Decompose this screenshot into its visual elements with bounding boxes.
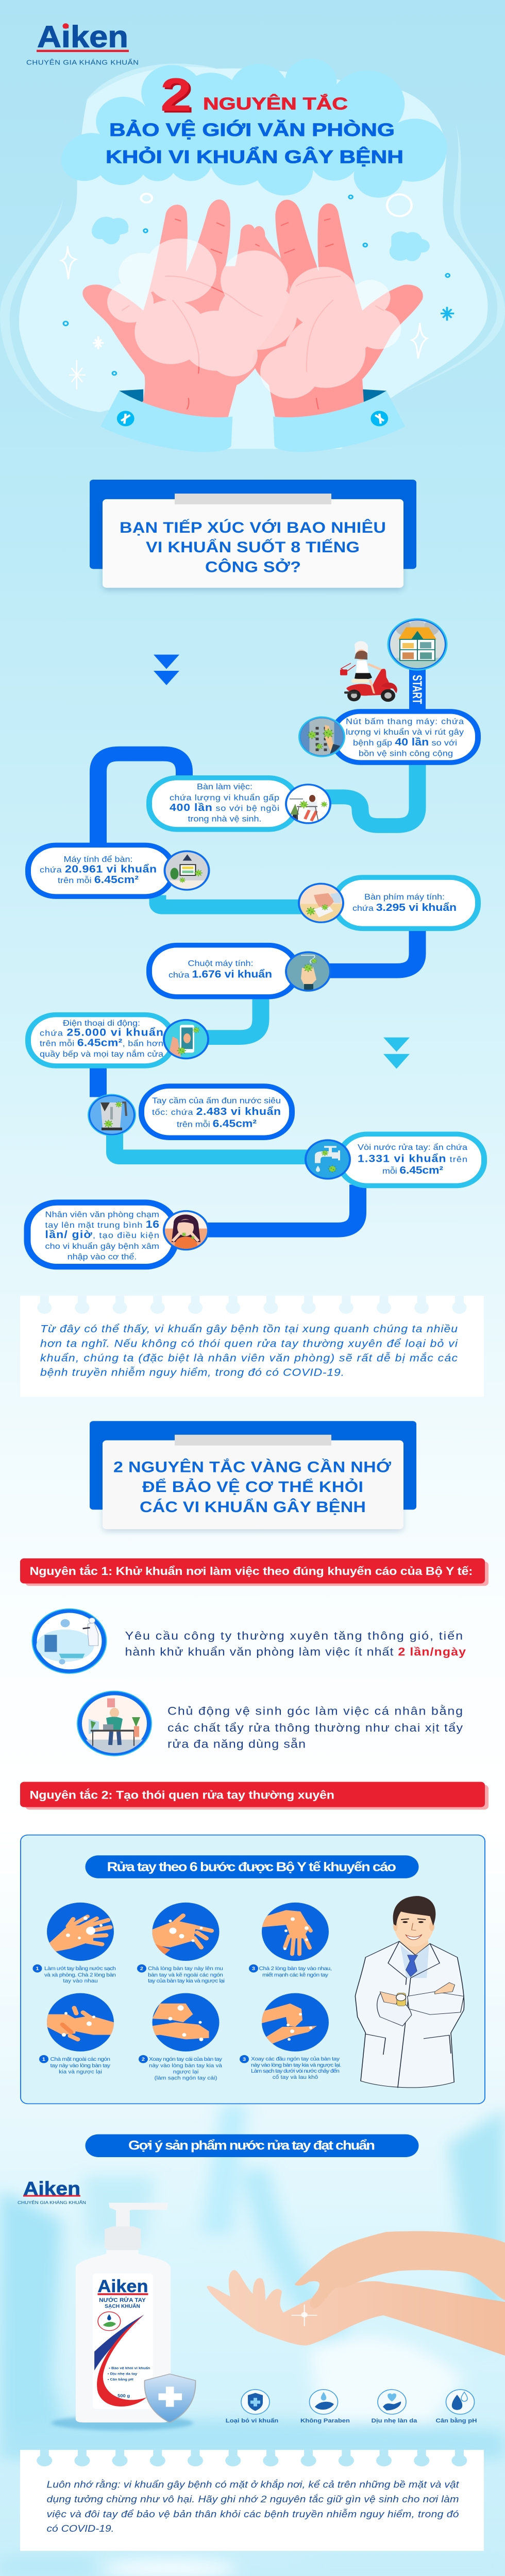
rule 1 point 1: Yêu cầu công ty thường xuyên tăng thông gió, tiến xyxy=(125,1630,463,1642)
step 1 caption: tay vào nhau xyxy=(63,1978,98,1984)
bubble: keyboard: Bàn phím máy tính: xyxy=(364,892,445,902)
bubble: elevator: lượng vi khuẩn và vi rút gây xyxy=(346,727,464,737)
left cuff xyxy=(100,391,232,452)
bubble: faucet: 1.331 vi khuẩn trên xyxy=(358,1153,467,1164)
product pill: Gợi ý sản phẩm nước rửa tay đạt chuẩn xyxy=(128,2138,375,2153)
icon: start house xyxy=(388,619,447,671)
step 3 caption: Chà 2 lòng bàn tay vào nhau, xyxy=(259,1966,332,1972)
bubble: faucet: mỗi 6.45cm² xyxy=(382,1164,443,1176)
step 1 caption: 1 xyxy=(36,1967,39,1972)
bubble: kettle xyxy=(141,1086,292,1138)
step 6 caption: 3 xyxy=(243,2057,246,2062)
scooter rider xyxy=(340,641,397,702)
title: 2 xyxy=(160,69,192,121)
rule 1 banner: Nguyên tắc 1: Khử khuẩn nơi làm việc theo đúng khuyến cáo của Bộ Y tế: xyxy=(30,1565,473,1578)
icon: pH balance xyxy=(435,2389,477,2424)
bubble: elevator: bồn vệ sinh công cộng xyxy=(359,749,453,758)
connector: start pole xyxy=(409,664,426,714)
bubble: elevator: bệnh gấp 40 lần so với xyxy=(353,736,457,748)
right hand xyxy=(252,200,423,419)
right cuff xyxy=(273,391,405,452)
connector: elevator to desk xyxy=(319,760,417,826)
note: conclusion 2: dụng tưởng chừng như vô hại. Hãy ghi nhớ 2 nguyên tắc giữ gìn vệ sinh cho nơi làm xyxy=(46,2494,459,2505)
step 6 caption: này vào lòng bàn tay kia và ngược lại. xyxy=(251,2062,341,2068)
panel: six hand washing steps xyxy=(21,1835,485,2104)
note: conclusion 1: hơn ta nghĩ. Nếu không có thói quen rửa tay thường xuyên để loại bỏ vi xyxy=(40,1337,458,1349)
connector: mouse to phone xyxy=(191,996,261,1038)
step 2 caption: tay của bàn tay kia và ngược lại xyxy=(148,1978,225,1984)
step 6 image xyxy=(262,1993,329,2052)
bubble: desk: 400 lần so với bệ ngồi xyxy=(170,801,279,813)
product bottle: NƯỚC RỬA TAY xyxy=(99,2296,146,2303)
bubble: faucet xyxy=(339,1134,484,1185)
product bottle: • Bảo vệ khỏi vi khuẩn xyxy=(109,2366,150,2370)
title: KHỎI VI KHUẨN GÂY BỆNH xyxy=(106,147,403,167)
step 5 caption: Xoay ngón tay cái của bàn tay xyxy=(149,2057,222,2062)
bubble: elevator: Nút bấm thang máy: chứa xyxy=(346,717,464,726)
heading card 1: CÔNG SỞ? xyxy=(205,558,301,575)
product logo: Aiken xyxy=(23,2177,80,2199)
step 2 caption: bàn tay và kẽ ngoài các ngón xyxy=(148,1972,223,1978)
step 3 image xyxy=(262,1903,329,1961)
product bottle xyxy=(52,2203,195,2431)
step 5 caption: 2 xyxy=(142,2057,145,2062)
connector: phone to kettle xyxy=(90,1065,107,1097)
title xyxy=(106,69,403,167)
icon: woman touching face xyxy=(164,1211,208,1250)
icon: kettle xyxy=(88,1094,136,1136)
bubble: face touching: lần/ giờ, tạo điều kiện xyxy=(45,1228,159,1241)
step 4 caption: tay này vào lòng bàn tay xyxy=(50,2063,110,2069)
icon: faucet xyxy=(306,1140,350,1179)
logo: CHUYÊN GIA KHÁNG KHUẨN xyxy=(26,58,139,66)
heading card 1: VI KHUẨN SUỐT 8 TIẾNG xyxy=(146,538,360,556)
step 3 caption: miết mạnh các kẽ ngón tay xyxy=(262,1972,328,1978)
dark inner cuffs xyxy=(119,389,386,404)
icon: keyboard xyxy=(299,884,343,922)
label: Cân bằng pH xyxy=(435,2417,477,2424)
bubble: desktop computer: chứa 20.961 vi khuẩn xyxy=(40,863,157,875)
heading card 2: ĐỂ BẢO VỆ CƠ THỂ KHỎI xyxy=(142,1478,363,1495)
heading card 2: CÁC VI KHUẨN GÂY BỆNH xyxy=(140,1498,366,1516)
doctor illustration xyxy=(355,1896,464,2088)
note: conclusion 2: việc và đôi tay để bảo vệ bản thân khỏi các bệnh truyền nhiễm nguy hiểm, trong đó xyxy=(46,2509,459,2520)
logo xyxy=(26,20,139,66)
START label: START xyxy=(410,675,424,704)
bubble: mouse xyxy=(149,945,297,997)
bubble: phone: quầy bếp và mọi tay nắm cửa xyxy=(40,1049,164,1059)
step 3 caption xyxy=(249,1964,332,1978)
bubble: desktop computer: trên mỗi 6.45cm² xyxy=(58,873,139,886)
arrow down blue xyxy=(154,655,179,685)
bubble: face touching: nhập vào cơ thể. xyxy=(68,1252,137,1261)
step 2 caption: 2 xyxy=(140,1967,143,1972)
bubble: keyboard: chứa 3.295 vi khuẩn xyxy=(352,901,457,913)
product logo: CHUYÊN GIA KHÁNG KHUẨN xyxy=(18,2200,86,2205)
step 4 caption: 1 xyxy=(42,2057,45,2062)
step 5 caption: này vào lòng bàn tay kia và xyxy=(149,2063,223,2069)
note: conclusion 1 xyxy=(20,1296,484,1397)
step 1 caption: và xà phòng. Chà 2 lòng bàn xyxy=(44,1972,116,1978)
icon: office desk xyxy=(286,785,330,823)
bubble: face touching xyxy=(27,1202,175,1267)
hero backdrop blob xyxy=(19,65,488,449)
step 6 caption: Làm sạch tay dưới vòi nước chảy đến xyxy=(251,2068,340,2074)
label: Loại bỏ vi khuẩn xyxy=(226,2417,278,2424)
bubble: elevator xyxy=(333,711,478,762)
bubble: mouse: Chuột máy tính: xyxy=(188,959,253,968)
step 2 image xyxy=(153,1903,220,1961)
bubble: desktop computer: Máy tính để bàn: xyxy=(64,855,132,864)
hero illustration xyxy=(0,59,505,452)
product pill xyxy=(86,2134,418,2157)
heading card 2: 2 NGUYÊN TẮC VÀNG CẦN NHỚ xyxy=(113,1459,392,1476)
soap foam xyxy=(107,239,401,398)
decorative light rays xyxy=(0,2105,505,2576)
connector: desk to computer xyxy=(98,754,184,848)
bubble: faucet: Vòi nước rửa tay: ẩn chứa xyxy=(358,1143,468,1152)
left hand xyxy=(82,199,290,418)
product bottle: SẠCH KHUẨN xyxy=(105,2303,140,2309)
bubble: kettle: tốc: chứa 2.483 vi khuẩn xyxy=(152,1106,281,1117)
step 4 image xyxy=(47,1993,114,2052)
title cloud xyxy=(61,59,447,198)
label: Không Paraben xyxy=(300,2417,350,2424)
icon: desktop computer xyxy=(165,851,209,890)
icon: no paraben xyxy=(300,2389,350,2424)
step 5 caption: ngược lại xyxy=(173,2069,198,2075)
bubble: phone xyxy=(28,1015,173,1066)
icon: computer mouse xyxy=(286,952,330,991)
bubble: face touching: cho vi khuẩn gây bệnh xâm xyxy=(45,1242,159,1251)
bubble: phone: chứa 25.000 vi khuẩn xyxy=(40,1026,163,1038)
step 5 caption xyxy=(139,2055,223,2081)
logo: Aiken xyxy=(37,20,128,54)
product bottle: • Cân bằng pH xyxy=(108,2377,133,2381)
bubble: keyboard xyxy=(335,877,478,928)
note: conclusion 1: khuẩn, chúng ta (đặc biệt là nhân viên văn phòng) sẽ rất dễ bị mắc các xyxy=(40,1352,458,1364)
bubble: desk xyxy=(149,778,297,829)
bubble: mouse: chứa 1.676 vi khuẩn xyxy=(169,968,272,980)
title: 2 xyxy=(162,71,194,123)
step 6 caption: cổ tay và lau khô xyxy=(273,2075,318,2080)
note: conclusion 1: bệnh truyền nhiễm nguy hiểm, trong đó có COVID-19. xyxy=(40,1366,344,1378)
step 1 caption xyxy=(33,1964,116,1984)
rule 1 point 2: các chất tẩy rửa thông thường như chai xịt tẩy xyxy=(167,1721,463,1734)
rule 1 point 2 xyxy=(167,1705,463,1750)
connector: faucet to face xyxy=(196,1184,358,1230)
icon: phone xyxy=(164,1020,208,1059)
bubble: phone: Điện thoại di động: xyxy=(63,1019,140,1028)
title: BẢO VỆ GIỚI VĂN PHÒNG xyxy=(109,120,395,140)
title: NGUYÊN TẮC xyxy=(203,94,348,113)
connector: kettle to faucet xyxy=(114,1131,319,1157)
panel title pill: Rửa tay theo 6 bước được Bộ Y tế khuyến cáo xyxy=(107,1859,396,1874)
product hands photo xyxy=(207,2231,505,2355)
icon: remove bacteria xyxy=(226,2389,278,2424)
rule 2 banner: Nguyên tắc 2: Tạo thói quen rửa tay thường xuyên xyxy=(30,1788,334,1801)
note: conclusion 2: có COVID-19. xyxy=(46,2523,114,2534)
bubble: desktop computer xyxy=(28,845,173,896)
rule 1 point 1 xyxy=(125,1630,466,1658)
icon: personal desk xyxy=(77,1691,152,1756)
note: conclusion 2: Luôn nhớ rằng: vi khuẩn gây bệnh có mặt ở khắp nơi, kể cả trên những bề mặt và vật xyxy=(46,2479,460,2490)
step 4 caption: Chà mặt ngoài các ngón xyxy=(50,2057,110,2062)
connector: computer to keyboard xyxy=(158,895,309,907)
note: conclusion 2 xyxy=(20,2450,484,2551)
step 2 caption: Chà lòng bàn tay này lên mu xyxy=(148,1966,223,1972)
rule 1 point 2: rửa đa năng dùng sẵn xyxy=(167,1737,306,1750)
step 6 caption xyxy=(240,2055,341,2080)
rule 1 banner xyxy=(20,1558,489,1586)
connector: keyboard to mouse xyxy=(319,928,417,971)
label: Dịu nhẹ làn da xyxy=(372,2417,417,2424)
product bottle: • Dịu nhẹ da tay xyxy=(108,2371,137,2376)
bubble: face touching: Nhân viên văn phòng chạm xyxy=(45,1210,159,1219)
bubble: kettle: trên mỗi 6.45cm² xyxy=(177,1117,257,1129)
step 6 caption: Xoay các đầu ngón tay của bàn tay xyxy=(251,2056,340,2062)
step 3 caption: 3 xyxy=(252,1967,255,1972)
product bottle: Aiken xyxy=(97,2277,148,2296)
step 5 image xyxy=(153,1993,220,2052)
icon: disinfecting office xyxy=(32,1609,106,1673)
hero ribbons xyxy=(0,63,505,420)
bubble: desk: Bàn làm việc: xyxy=(197,782,252,791)
step 4 caption: kia và ngược lại xyxy=(59,2069,102,2075)
icon: gentle on skin xyxy=(372,2389,417,2424)
rule 1 point 2: Chủ động vệ sinh góc làm việc cá nhân bằng xyxy=(167,1705,463,1717)
bubble: desk: trong nhà vệ sinh. xyxy=(188,815,261,823)
bubble: desk: chứa lượng vi khuẩn gấp xyxy=(170,793,279,802)
heading card 2 xyxy=(90,1421,416,1532)
note: conclusion 1: Từ đây có thể thấy, vi khuẩn gây bệnh tồn tại xung quanh chúng ta nhiều xyxy=(40,1323,458,1334)
product bottle: 500 g xyxy=(117,2394,130,2398)
heading card 1: BẠN TIẾP XÚC VỚI BAO NHIÊU xyxy=(120,519,386,536)
step 2 caption xyxy=(137,1964,225,1984)
heading card 1 xyxy=(90,480,416,590)
arrow down cyan xyxy=(383,1038,410,1069)
hand creases xyxy=(122,219,384,410)
panel title pill xyxy=(86,1855,418,1878)
rule 1 point 1: hành khử khuẩn văn phòng làm việc ít nhất 2 lần/ngày xyxy=(125,1646,466,1658)
step 1 image xyxy=(47,1903,114,1961)
bubble: phone: trên mỗi 6.45cm², bẩn hơn xyxy=(40,1037,163,1048)
hero soap bubbles and sparkles xyxy=(61,194,454,389)
bubble: kettle: Tay cầm của ấm đun nước siêu xyxy=(152,1096,281,1105)
step 1 caption: Làm ướt tay bằng nước sạch xyxy=(44,1965,116,1972)
rule 2 banner xyxy=(20,1782,489,1809)
bubble: face touching: tay lên mặt trung bình 16 xyxy=(45,1218,159,1230)
step 4 caption xyxy=(39,2055,110,2075)
cuff buttons xyxy=(117,411,388,426)
icon: elevator buttons xyxy=(299,717,344,756)
step 5 caption: (làm sạch ngón tay cái) xyxy=(155,2075,217,2081)
